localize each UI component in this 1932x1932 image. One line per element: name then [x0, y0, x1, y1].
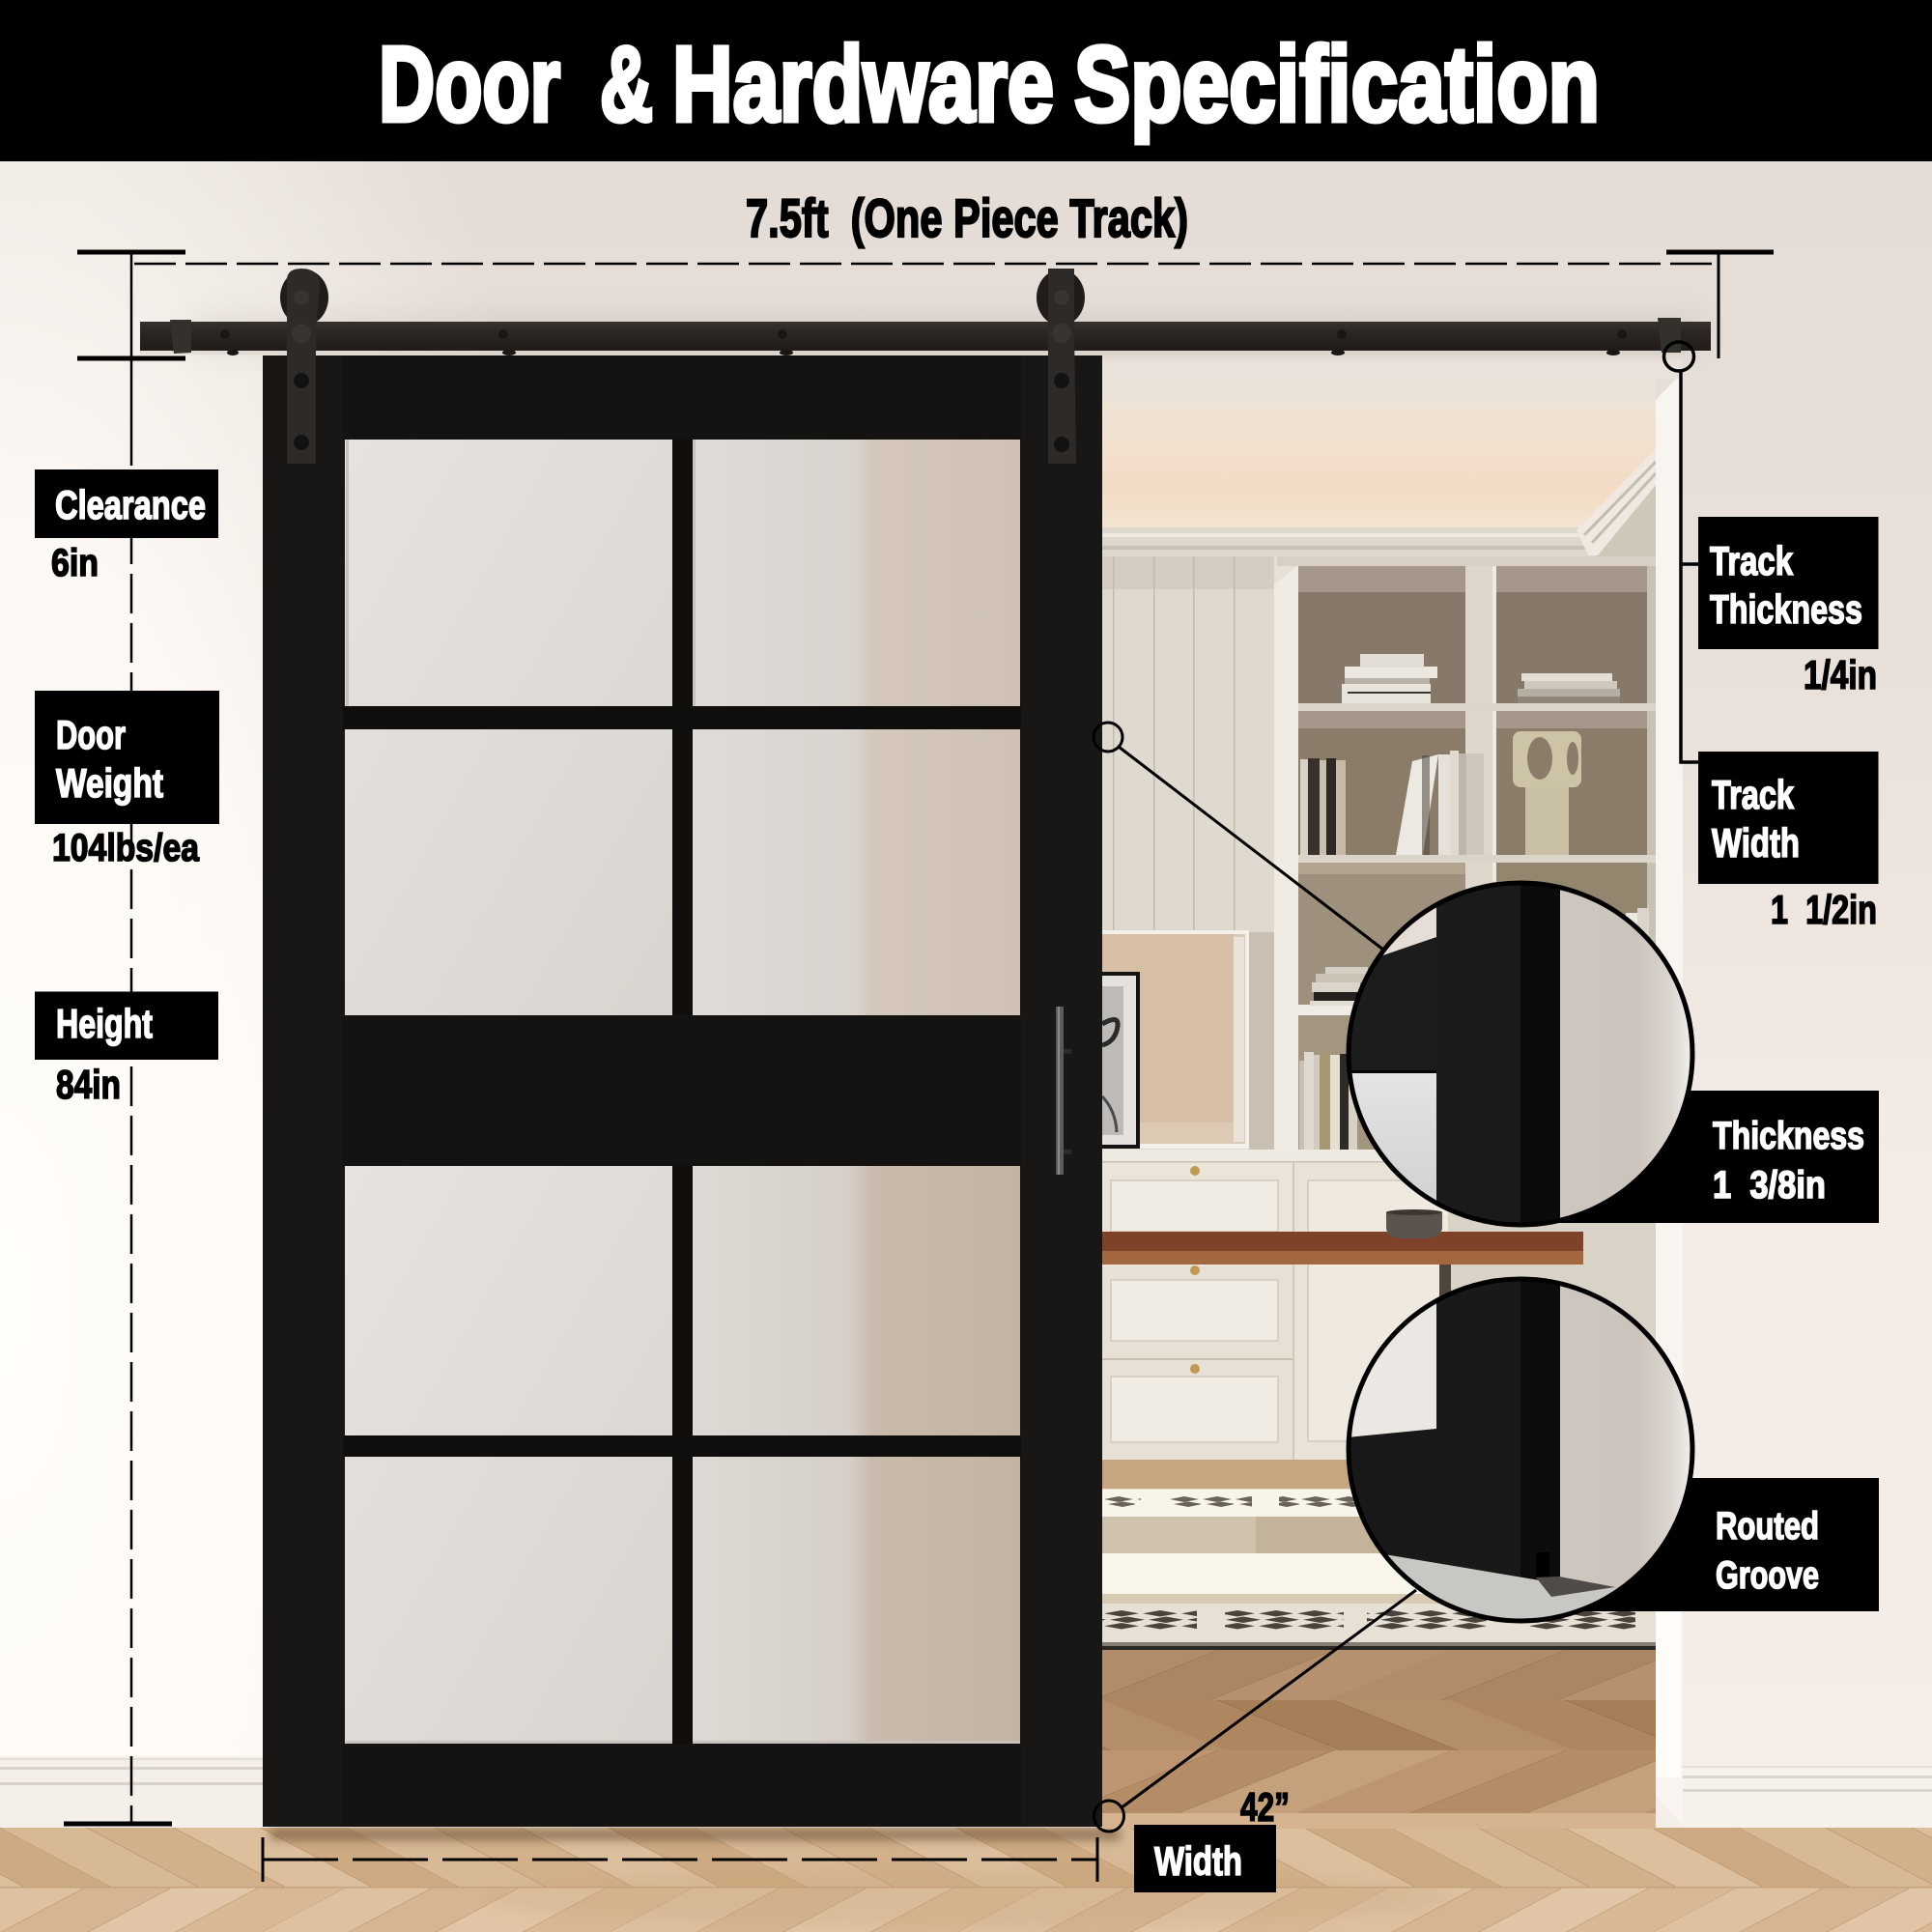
label: track width: 1 1/2in	[1771, 887, 1877, 932]
label: routed groove: Routed	[1716, 1505, 1819, 1548]
label: clearance: Clearance	[55, 482, 206, 527]
framed art	[1102, 930, 1249, 1149]
track stops	[170, 318, 1681, 354]
barn door	[263, 355, 1102, 1827]
floor	[0, 1828, 1932, 1932]
label: thickness	[1546, 1091, 1879, 1223]
left hanger strap	[280, 269, 328, 464]
label: track width: Width	[1712, 820, 1800, 866]
sliding track	[140, 318, 1711, 355]
routed groove callout connector	[1094, 1590, 1416, 1832]
label: clearance: 6in	[51, 542, 99, 584]
door handle	[1056, 1007, 1071, 1175]
title: Door	[379, 25, 560, 144]
right door jamb	[1102, 359, 1683, 1825]
table	[1102, 1232, 1583, 1303]
books second row	[1300, 751, 1484, 855]
title: &	[600, 25, 653, 144]
track shadow	[193, 314, 1700, 353]
shelf cells	[1298, 566, 1656, 1152]
crown moulding	[1102, 449, 1656, 556]
door panes	[344, 440, 1022, 1746]
bowl	[1386, 1209, 1442, 1238]
baseboard right	[1681, 1764, 1932, 1828]
label: track thickness: Track	[1710, 538, 1793, 583]
pane edge highlights	[346, 440, 1020, 1744]
doorway interior room	[1102, 378, 1656, 1829]
panelled wall	[1102, 556, 1286, 1175]
clearance and height dimension line	[64, 249, 185, 1826]
label: track thickness: 1/4in	[1804, 652, 1877, 697]
label: width: 42”	[1240, 1784, 1290, 1830]
title bar	[0, 0, 1932, 161]
soffit and ceiling cove	[1102, 378, 1656, 580]
door frame	[263, 355, 1102, 1827]
label: door weight: Weight	[56, 760, 163, 806]
track bolts	[220, 329, 1627, 355]
sculpture	[1513, 731, 1581, 855]
thickness callout connector	[1094, 723, 1383, 950]
label: width	[1134, 1784, 1290, 1892]
bookcase	[1274, 556, 1656, 1165]
label: width: Width	[1154, 1838, 1242, 1884]
label: door weight: Door	[56, 712, 126, 757]
label: track thickness	[1698, 517, 1878, 697]
label: door weight: 104lbs/ea	[52, 827, 200, 869]
title: Specification	[1074, 25, 1600, 144]
track length dimension line	[134, 249, 1774, 358]
track length label: 7.5ft (One Piece Track)	[746, 187, 1188, 248]
baseboard left	[0, 1756, 266, 1828]
label: track width: Track	[1712, 772, 1794, 817]
detail circle: routed groove	[1347, 1275, 1700, 1633]
title	[379, 25, 1600, 144]
cabinets	[1102, 1150, 1656, 1460]
label: thickness: Thickness	[1713, 1115, 1864, 1157]
title: Hardware	[672, 25, 1054, 144]
label: height	[35, 991, 218, 1107]
books top row	[1342, 654, 1620, 703]
interior floor and rug	[1102, 1460, 1656, 1829]
label: routed groove	[1584, 1478, 1879, 1611]
label: height: Height	[56, 1001, 153, 1046]
label: track width	[1698, 752, 1878, 932]
detail circle: door edge thickness	[1347, 879, 1700, 1236]
books lower rows	[1299, 908, 1649, 1150]
label: clearance	[35, 469, 218, 584]
track callout connector	[1663, 342, 1698, 762]
label: height: 84in	[56, 1062, 121, 1107]
label: door weight	[35, 691, 219, 869]
label: track thickness: Thickness	[1710, 586, 1862, 632]
door width dimension line	[263, 1837, 1097, 1882]
label: thickness: 1 3/8in	[1713, 1164, 1826, 1207]
label: routed groove: Groove	[1716, 1554, 1819, 1597]
right hanger strap	[1037, 269, 1085, 464]
